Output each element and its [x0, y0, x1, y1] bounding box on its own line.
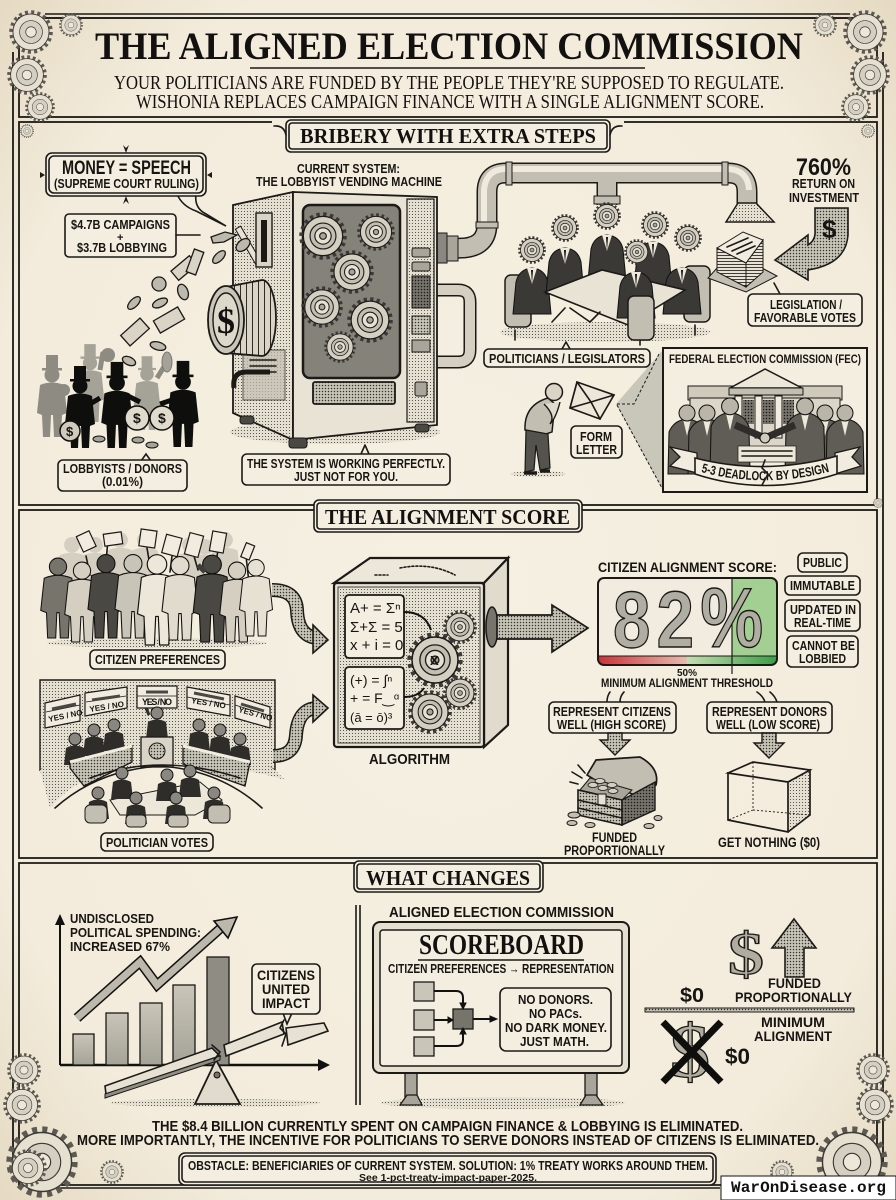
banner: 5-3 deadlock by design: 5-3 DEADLOCK BY DESIGN: [702, 463, 829, 480]
pipes: [437, 162, 774, 362]
label: funded proportionally: [564, 830, 665, 858]
formula box one: [345, 595, 404, 658]
arrow with dollar sign: [775, 208, 848, 280]
building: [688, 369, 842, 448]
icon: crossed out dollar: [663, 1010, 721, 1094]
tag: public: PUBLIC: [803, 555, 842, 570]
label: vending machine title: [256, 162, 442, 189]
no donors box: NO DARK MONEY.: [505, 1020, 607, 1035]
banner: 5-3 deadlock by design: [668, 446, 862, 486]
stat: 760% return on investment: RETURN ON: [792, 177, 855, 191]
label: zero above line: $0: [680, 985, 704, 1007]
formula box two: + = F‿ᵅ: [350, 690, 399, 706]
label: politicians / legislators: [484, 342, 650, 367]
algorithm box: [334, 558, 508, 747]
icon: empty box: [728, 762, 810, 832]
vote placards: [45, 686, 273, 728]
label: lobbyists / donors: (0.01%): [102, 475, 143, 489]
vote placards: YES / NO: [142, 697, 172, 707]
coin knob: [208, 280, 276, 356]
falling money: [121, 232, 252, 368]
label: citizen preferences: CITIZEN PREFERENCES: [95, 652, 220, 667]
callout: money = speech: (SUPREME COURT RULING): [54, 176, 199, 191]
vending machine: [208, 192, 440, 448]
obstacle box: [179, 1153, 716, 1185]
arrow: algorithm to score: [486, 605, 588, 652]
arrow: citizens to algorithm: [272, 590, 328, 653]
callout: spending amounts: $3.7B LOBBYING: [77, 240, 167, 255]
obstacle box: OBSTACLE: BENEFICIARIES OF CURRENT SYSTEM. SOLUTION: 1% TREATY WORKS AROUND THEM.: [188, 1159, 708, 1173]
score display: MINIMUM ALIGNMENT THRESHOLD: [601, 676, 773, 690]
formula box one: x + i = 0: [350, 637, 403, 654]
tag: cannot be lobbied: CANNOT BE: [792, 638, 855, 653]
tag: cannot be lobbied: LOBBIED: [799, 651, 846, 666]
tag: immutable: IMMUTABLE: [790, 578, 855, 593]
label: lobbyists / donors: LOBBYISTS / DONORS: [63, 462, 182, 476]
title underline: [250, 67, 645, 69]
formula box two: (ā = ō)³: [350, 710, 393, 725]
label: politician votes: POLITICIAN VOTES: [106, 835, 208, 850]
obstacle box: See 1-pct-treaty-impact-paper-2025.: [359, 1172, 537, 1184]
callout: spending amounts: [65, 214, 200, 257]
branch: represent citizens: WELL (HIGH SCORE): [557, 717, 666, 732]
subtitle: WISHONIA REPLACES CAMPAIGN FINANCE WITH A SINGLE ALIGNMENT SCORE.: [136, 92, 764, 113]
watermark: [721, 1176, 896, 1200]
desks: [64, 719, 251, 786]
tag: updated in real-time: UPDATED IN: [790, 602, 856, 617]
branch: represent citizens: REPRESENT CITIZENS: [553, 704, 671, 719]
label: funded proportionally: PROPORTIONALLY: [564, 843, 665, 858]
tag: updated in real-time: [785, 600, 860, 631]
label: form letter: FORM: [580, 429, 612, 444]
branch: represent citizens: [549, 692, 676, 755]
figure: disappointed citizen: [510, 384, 566, 477]
heading: alignment score: THE ALIGNMENT SCORE: [325, 505, 570, 529]
illustration: broken seesaw: [105, 1020, 328, 1107]
branch: represent donors: WELL (LOW SCORE): [716, 717, 820, 732]
label: form letter: [571, 426, 622, 458]
label: legislation / favorable votes: [748, 283, 862, 326]
stat: 760% return on investment: [789, 154, 859, 205]
property tags: [785, 553, 860, 667]
tag: cannot be lobbied: [787, 636, 858, 667]
label: funded proportionally: [735, 975, 853, 1005]
scoreboard: SCOREBOARD: [419, 930, 584, 961]
chart: undisclosed political spending: UNDISCLOSED: [70, 911, 154, 926]
lobbyists and donors: $: [66, 424, 74, 439]
lobbyists and donors: $: [158, 410, 166, 426]
tag: updated in real-time: REAL-TIME: [794, 615, 851, 630]
label: algorithm: ALGORITHM: [369, 751, 450, 768]
coin knob: $: [217, 301, 235, 341]
flow diagram: [414, 982, 497, 1056]
no donors box: NO DONORS.: [518, 992, 593, 1007]
label: aligned election commission: ALIGNED ELECTION COMMISSION: [389, 905, 614, 921]
podium: [141, 707, 173, 767]
formula box one: A+ = Σⁿ: [350, 600, 401, 617]
divider: [356, 905, 360, 1105]
label: funded proportionally: FUNDED: [592, 830, 637, 845]
illustration: politicians with gear heads around table: [500, 203, 710, 345]
chart: undisclosed political spending: POLITICAL SPENDING:: [70, 925, 201, 940]
callout: citizens united impact: CITIZENS: [257, 968, 315, 983]
panel: what changes: [55, 861, 854, 1185]
score display: 50%: [677, 667, 698, 679]
formula box two: (+) = ∫ⁿ: [350, 672, 392, 688]
vote placards: YES / NO: [237, 705, 273, 723]
label: legislation / favorable votes: FAVORABLE VOTES: [754, 311, 856, 325]
scoreboard: [373, 922, 629, 1109]
no donors box: [500, 988, 611, 1051]
icon: treasure chest: [567, 757, 662, 828]
stat: 760% return on investment: INVESTMENT: [789, 191, 859, 205]
commissioners shaking hands: [668, 398, 864, 474]
arrow: votes to algorithm: [273, 695, 328, 756]
summary text: [77, 1118, 819, 1149]
chart: undisclosed political spending: INCREASED 67%: [70, 939, 170, 954]
callout: citizens united impact: IMPACT: [262, 996, 311, 1011]
heading: bribery: BRIBERY WITH EXTRA STEPS: [300, 124, 596, 148]
callout: system working perfectly: THE SYSTEM IS WORKING PERFECTLY.: [247, 457, 445, 471]
illustration: chamber with votes: [40, 680, 285, 827]
score display: [598, 559, 777, 690]
branch: represent donors: [707, 692, 832, 758]
label: legislation / favorable votes: LEGISLATION /: [770, 298, 842, 312]
summary text: THE $8.4 BILLION CURRENTLY SPENT ON CAMPAIGN FINANCE & LOBBYING IS ELIMINATED.: [152, 1118, 743, 1135]
label: vending machine title: THE LOBBYIST VENDING MACHINE: [256, 175, 442, 189]
formula box two: [345, 667, 404, 729]
panel: bribery with extra steps: [37, 119, 868, 493]
vote placards: YES / NO: [89, 700, 125, 714]
icon: dollar up: $: [728, 921, 764, 987]
label: form letter: LETTER: [576, 442, 617, 457]
subtitle: [114, 73, 784, 113]
chart: undisclosed political spending: [55, 911, 330, 1071]
algorithm box: X: [430, 653, 439, 668]
title: THE ALIGNED ELECTION COMMISSION: [95, 25, 803, 68]
FEC panel: [616, 347, 868, 493]
watermark: WarOnDisease.org: [731, 1179, 886, 1197]
formula box one: Σ+Σ = 5: [350, 619, 403, 636]
lobbyists and donors: [37, 344, 199, 448]
score display: CITIZEN ALIGNMENT SCORE:: [598, 559, 777, 575]
scoreboard: CITIZEN PREFERENCES → REPRESENTATION: [388, 961, 614, 976]
no donors box: NO PACs.: [529, 1006, 582, 1021]
vote placards: YES / NO: [191, 696, 226, 710]
vote placards: YES / NO: [48, 708, 83, 724]
label: citizen preferences: [90, 650, 225, 669]
arrow with dollar sign: $: [822, 214, 837, 244]
heading: what changes: WHAT CHANGES: [366, 866, 530, 890]
label: zero below line: $0: [725, 1044, 750, 1069]
stat: 760% return on investment: 760%: [796, 154, 851, 181]
callout: money = speech: [40, 145, 226, 226]
icon: paper stack: [708, 232, 777, 292]
label: lobbyists / donors: [58, 454, 187, 491]
lower seating: [55, 765, 262, 827]
callout: system working perfectly: JUST NOT FOR YOU.: [294, 470, 398, 484]
callout: citizens united impact: UNITED: [262, 982, 310, 997]
label: funded proportionally: PROPORTIONALLY: [735, 989, 853, 1005]
label: minimum alignment: [754, 1014, 832, 1044]
label: politicians / legislators: POLITICIANS / LEGISLATORS: [489, 352, 645, 366]
callout: spending amounts: +: [117, 232, 123, 244]
label: minimum alignment: MINIMUM: [761, 1014, 825, 1030]
label: vending machine title: CURRENT SYSTEM:: [297, 162, 400, 176]
icon: envelope: [570, 382, 614, 419]
branch: represent donors: REPRESENT DONORS: [712, 704, 827, 719]
threshold line: [645, 1008, 854, 1012]
label: minimum alignment: ALIGNMENT: [754, 1028, 832, 1044]
callout: money = speech: MONEY = SPEECH: [62, 158, 191, 179]
icon: crossed out dollar: $: [670, 1010, 710, 1094]
score display: 82%: [613, 572, 763, 665]
callout: system working perfectly: [242, 445, 450, 485]
subtitle: YOUR POLITICIANS ARE FUNDED BY THE PEOPLE THEY'RE SUPPOSED TO REGULATE.: [114, 73, 784, 94]
callout: citizens united impact: [252, 964, 320, 1024]
illustration: citizens crowd: [41, 529, 272, 648]
label: get nothing: GET NOTHING ($0): [718, 835, 820, 850]
heading: bribery: [272, 120, 624, 152]
icon: dollar up: [728, 919, 816, 987]
funding rule graphic: [645, 919, 854, 1094]
no donors box: JUST MATH.: [520, 1034, 589, 1049]
label: funded proportionally: FUNDED: [768, 975, 821, 991]
callout: spending amounts: $4.7B CAMPAIGNS: [71, 217, 170, 232]
panel: the alignment score: [40, 500, 860, 858]
lobbyists and donors: $: [133, 410, 141, 426]
